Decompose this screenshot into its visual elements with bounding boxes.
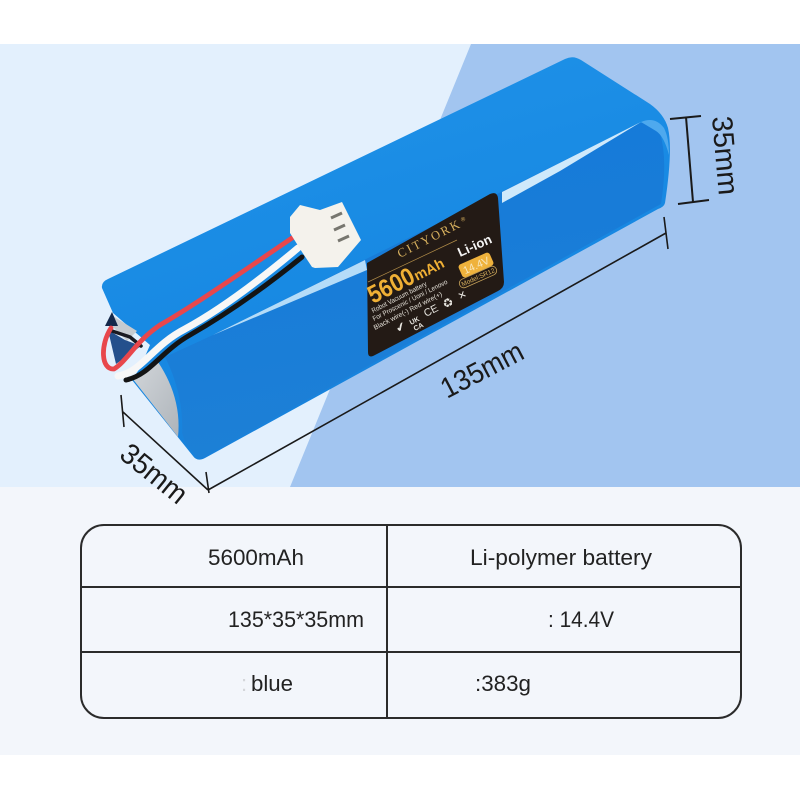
wire loop (103, 238, 302, 380)
red wire (103, 238, 292, 369)
divider (368, 240, 457, 282)
dimension: 35mm height (670, 115, 744, 204)
battery end face (132, 362, 179, 437)
certification marks: ✔ (393, 319, 408, 336)
edge highlight right of label (502, 122, 641, 203)
dimension: 135mm length: 135mm (435, 336, 529, 405)
certification marks: CA (413, 322, 425, 333)
cell: colour separator: : (241, 671, 247, 696)
description: For Proscenic / Uoni / Lenovo (372, 279, 449, 323)
cell: battery type: Li-polymer battery (470, 545, 652, 570)
photo background: darker blue diagonal (290, 44, 800, 487)
cell: colour: blue (251, 671, 293, 696)
cell: capacity: 5600mAh (208, 545, 304, 570)
description: Robot Vacuum battery (371, 281, 429, 315)
cell: weight: :383g (475, 671, 531, 696)
battery body (102, 57, 670, 460)
dimension: 35mm height: 35mm (705, 115, 744, 196)
chemistry: Li-ion (455, 231, 494, 260)
table section background (0, 487, 800, 755)
registered mark: ® (460, 215, 467, 224)
model badge: Model:SR12 (461, 267, 496, 288)
cell: dimensions: 135*35*35mm (228, 607, 364, 632)
white wire (118, 248, 298, 376)
cell: voltage: : 14.4V (548, 607, 614, 632)
corner highlight (641, 120, 669, 155)
edge highlight left of label (213, 260, 367, 335)
certification marks: ✕ (456, 289, 469, 303)
battery lower facet (165, 123, 664, 457)
certification marks: CE (422, 302, 440, 320)
voltage badge (458, 252, 494, 278)
certification marks: UK (409, 316, 421, 327)
certification marks: ♻ (440, 294, 456, 312)
capacity: 5600 (363, 262, 419, 309)
dimension: 35mm width (114, 395, 208, 511)
certification marks (393, 289, 469, 336)
voltage badge: 14.4V (461, 255, 491, 277)
brand: CITYORK (395, 217, 462, 261)
cavity: gray interior (112, 316, 137, 341)
photo background: light blue panel (0, 44, 800, 487)
specification table (81, 525, 741, 718)
battery pack (102, 57, 670, 460)
dimension: 35mm width: 35mm (114, 438, 194, 511)
connector (290, 202, 361, 268)
cavity: dark notch (105, 312, 118, 326)
black wire (126, 257, 302, 380)
dimension: 135mm length (206, 217, 668, 493)
battery label (363, 193, 504, 356)
capacity unit: mAh (412, 256, 447, 285)
description: Black wire(-) Red wire(+) (373, 291, 444, 332)
cavity: dark interior (108, 330, 141, 364)
